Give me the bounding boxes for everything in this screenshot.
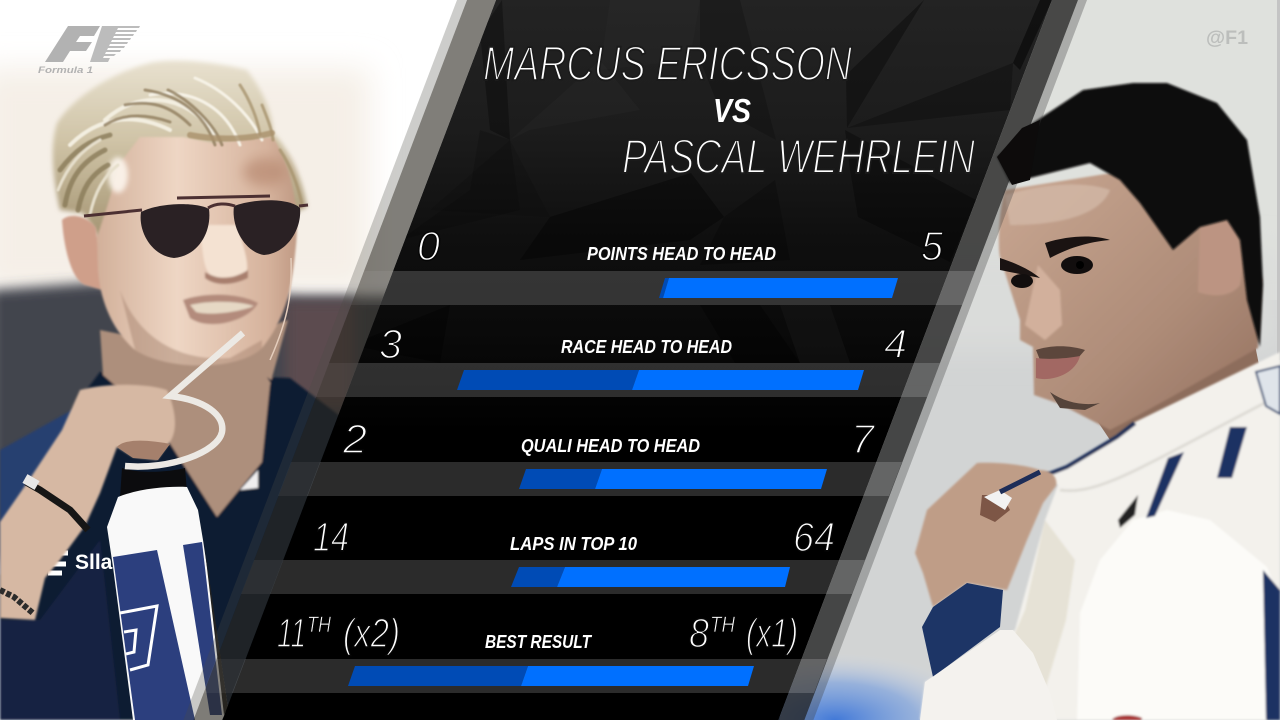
stat row: best result — [277, 610, 798, 686]
stat row: best result: (x2) — [343, 610, 400, 656]
shirt — [0, 320, 345, 720]
race suit — [920, 352, 1280, 720]
drinking straw — [125, 333, 243, 467]
logo: Formula 1: Formula 1 — [38, 65, 93, 75]
blue glow — [745, 630, 945, 720]
stat row: quali head to head: 2 — [342, 416, 367, 462]
title: driver names: MARCUS ERICSSON — [483, 38, 852, 91]
stat row: laps in top 10: 14 — [313, 514, 349, 560]
row bands — [203, 271, 975, 693]
left accent stripes — [183, 0, 496, 720]
stat row: race head to head — [379, 321, 907, 390]
neck — [1090, 345, 1260, 440]
earphone wire — [270, 258, 291, 360]
stat row: best result: TH — [307, 612, 331, 637]
watermark: @F1: @F1 — [1206, 28, 1248, 49]
stat row: best result: 8 — [689, 610, 709, 656]
head — [999, 170, 1262, 430]
hair — [997, 83, 1263, 347]
hair strands — [58, 78, 302, 215]
stat row: best result: (x1) — [746, 610, 798, 656]
hair tip over stripe — [997, 120, 1040, 185]
stat row: points head to head — [417, 223, 943, 298]
right accent stripes — [778, 0, 1087, 720]
stat row: quali head to head: QUALI HEAD TO HEAD — [521, 435, 700, 456]
head — [62, 137, 297, 366]
stat row: best result: TH — [710, 612, 735, 637]
hand — [915, 463, 1056, 607]
title: driver names: PASCAL WEHRLEIN — [622, 131, 975, 184]
stat row: quali head to head — [342, 416, 876, 489]
title: driver names — [483, 38, 975, 184]
photo: Marcus Ericsson — [0, 0, 640, 720]
photo: Pascal Wehrlein — [745, 0, 1280, 720]
shirt sponsor: Slla — [75, 551, 113, 574]
cuff — [922, 583, 1003, 677]
stat row: laps in top 10 — [313, 514, 835, 587]
icon: sunglasses — [84, 196, 308, 258]
sleeve — [920, 630, 1057, 720]
stat row: laps in top 10: LAPS IN TOP 10 — [510, 533, 638, 554]
logo: Formula 1 — [38, 26, 140, 75]
stat row: points head to head: 0 — [417, 223, 440, 269]
stat row: best result: 11 — [277, 610, 306, 656]
stat row: quali head to head: 7 — [851, 416, 876, 462]
stat row: laps in top 10: 64 — [793, 514, 835, 560]
stat row: race head to head: RACE HEAD TO HEAD — [561, 336, 732, 357]
stat row: best result: BEST RESULT — [485, 631, 592, 652]
arm and hand — [0, 385, 175, 620]
low-poly texture — [481, 0, 1052, 200]
stat row: race head to head: 4 — [884, 321, 907, 367]
stat row: points head to head: 5 — [921, 223, 943, 269]
bracelets — [0, 474, 88, 614]
central dark panel — [222, 0, 1052, 720]
title: driver names: VS — [713, 92, 751, 129]
hair back — [53, 61, 307, 240]
neck — [100, 320, 288, 517]
face features — [1000, 237, 1110, 410]
shirt sponsor — [48, 551, 113, 574]
stat row: points head to head: POINTS HEAD TO HEAD — [587, 243, 776, 264]
bottle — [107, 468, 228, 720]
stat row: race head to head: 3 — [379, 321, 402, 367]
